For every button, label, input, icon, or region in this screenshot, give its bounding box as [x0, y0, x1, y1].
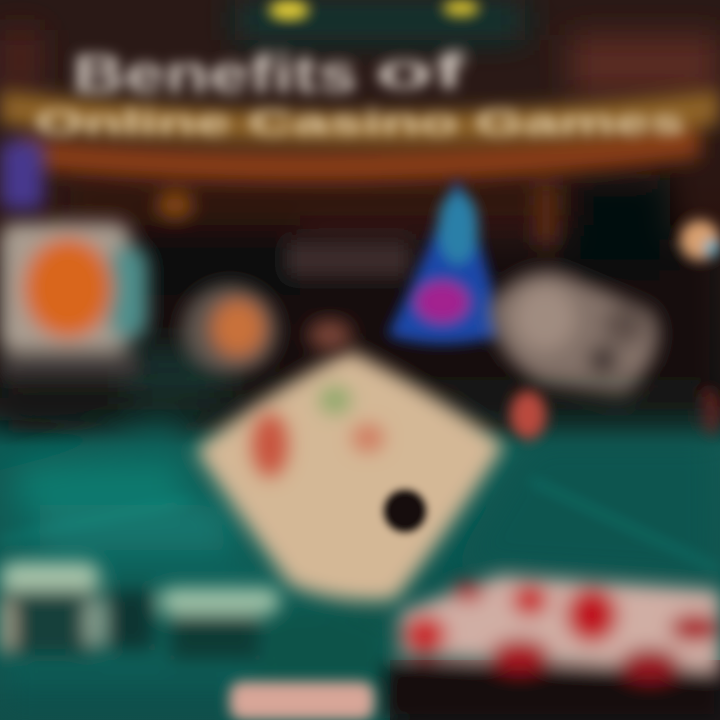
ceiling lights [269, 0, 479, 20]
card pips [252, 386, 384, 477]
right small cards [490, 271, 658, 400]
title: Benefits [72, 44, 358, 104]
right edge orb [680, 220, 720, 436]
main card [195, 350, 505, 601]
purple badge [0, 140, 44, 210]
green table [0, 395, 720, 720]
card body [195, 350, 505, 601]
card black dot [383, 489, 427, 533]
red chips right [385, 575, 720, 720]
gold and orange bands [0, 90, 720, 278]
blue cone [388, 178, 502, 344]
green chips left [0, 562, 280, 660]
title [35, 43, 685, 142]
title: Online Casino Games [35, 104, 685, 142]
bottom chip [230, 682, 374, 720]
red tip near card [510, 391, 546, 439]
left screen icon [0, 222, 148, 381]
small screen icon [182, 284, 278, 376]
upper wall [0, 0, 720, 420]
table lines [0, 480, 720, 570]
title: of [375, 43, 466, 99]
